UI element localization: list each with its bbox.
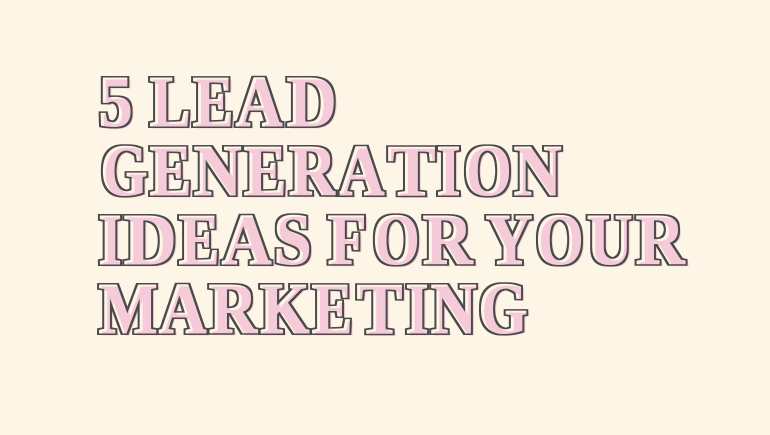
title line 4 bbox=[99, 268, 527, 349]
title line 4: E bbox=[312, 268, 352, 349]
title line 3 bbox=[99, 199, 685, 280]
title line 4: K bbox=[260, 268, 309, 349]
title line 2: T bbox=[388, 130, 435, 211]
title line 2: G bbox=[101, 130, 147, 211]
title line 1: A bbox=[236, 61, 282, 142]
title line 4: A bbox=[159, 268, 206, 349]
title line 3: R bbox=[423, 199, 473, 280]
title line 2 bbox=[101, 130, 561, 211]
title line 4: G bbox=[479, 268, 527, 349]
title line 2: E bbox=[150, 130, 191, 211]
title line 2: N bbox=[514, 130, 561, 211]
title line 1 bbox=[99, 61, 336, 142]
title line 3: E bbox=[179, 199, 219, 280]
title line 2: N bbox=[194, 130, 241, 211]
title line 3: Y bbox=[486, 199, 532, 280]
title line 4: R bbox=[209, 268, 258, 349]
title line 3: I bbox=[99, 199, 121, 280]
title: 5 lead generation ideas for your marketing bbox=[99, 61, 685, 349]
title line 3: D bbox=[124, 199, 176, 280]
title line 4: T bbox=[357, 268, 402, 349]
title line 3: U bbox=[587, 199, 632, 280]
title line 1: 5 bbox=[99, 61, 132, 142]
title line 1: L bbox=[150, 61, 190, 142]
title line 2: E bbox=[244, 130, 286, 211]
title line 2: I bbox=[437, 130, 460, 211]
title line 2: R bbox=[289, 130, 337, 211]
title line 3: A bbox=[222, 199, 271, 280]
title line 4: N bbox=[431, 268, 476, 349]
title line 4: M bbox=[99, 268, 157, 349]
title line 3: R bbox=[636, 199, 685, 280]
title line 3: O bbox=[373, 199, 419, 280]
title line 3: S bbox=[274, 199, 311, 280]
title line 1: D bbox=[287, 61, 336, 142]
title line 1: E bbox=[193, 61, 233, 142]
title line 3: F bbox=[328, 199, 366, 280]
title line 3: O bbox=[536, 199, 583, 280]
title line 4: I bbox=[406, 268, 428, 349]
title line 2: A bbox=[338, 130, 384, 211]
title line 2: O bbox=[464, 130, 511, 211]
